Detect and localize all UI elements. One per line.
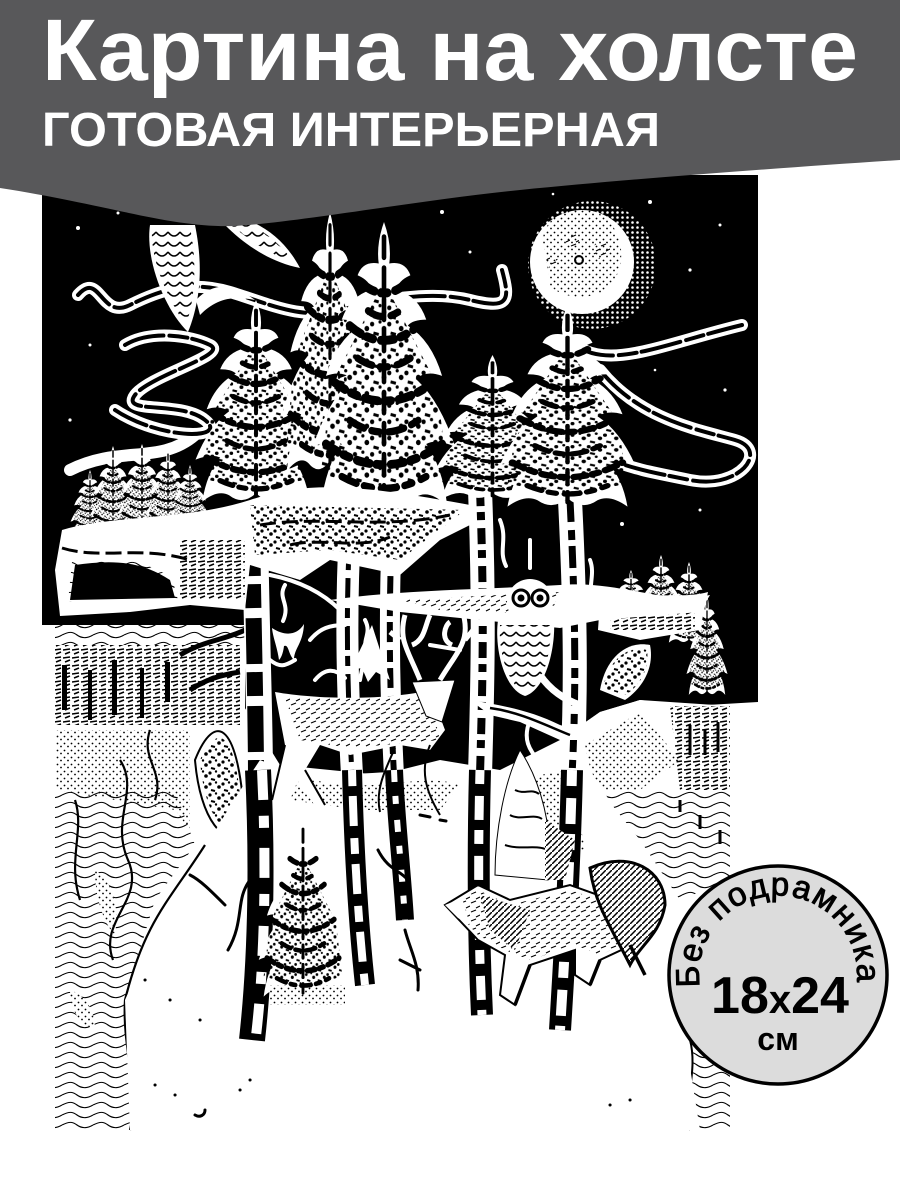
- snowy branch band below deer: [470, 700, 600, 740]
- far left forest: [71, 444, 209, 535]
- smoke ribbons in the sky: [70, 270, 750, 482]
- badge size: 18x24: [711, 967, 849, 1025]
- page header banner: [0, 0, 900, 226]
- badge unit: см: [757, 1021, 799, 1057]
- lower right textured landscape: [560, 700, 730, 1130]
- badge curved label: Без подрамника: [676, 877, 876, 986]
- perched owl: [497, 579, 580, 705]
- small snowy fir: [259, 820, 347, 1005]
- bare branches in the dark gap: [270, 520, 594, 760]
- deer: [272, 610, 473, 815]
- flying owl wings: [149, 215, 300, 332]
- full moon: [528, 201, 656, 329]
- subtitle: ГОТОВАЯ ИНТЕРЬЕРНАЯ: [42, 104, 660, 157]
- firs crowns: [196, 212, 635, 507]
- far right forest: [598, 555, 728, 700]
- tree trunks against the night: [252, 490, 575, 780]
- title: Картина на холсте: [42, 2, 858, 99]
- trunks over snow: [252, 770, 572, 1040]
- branches and footprints: [145, 815, 630, 1116]
- night sky: [42, 175, 758, 775]
- snow bank under trees: [125, 760, 700, 1130]
- snow shelf across the forest: [55, 487, 470, 616]
- stars: [68, 193, 727, 526]
- small snowy spruce behind fox: [495, 750, 575, 880]
- size badge: [667, 864, 889, 1086]
- lower left textured landscape: [55, 625, 245, 1130]
- second snow shelf: [330, 584, 710, 628]
- fox: [445, 861, 665, 1005]
